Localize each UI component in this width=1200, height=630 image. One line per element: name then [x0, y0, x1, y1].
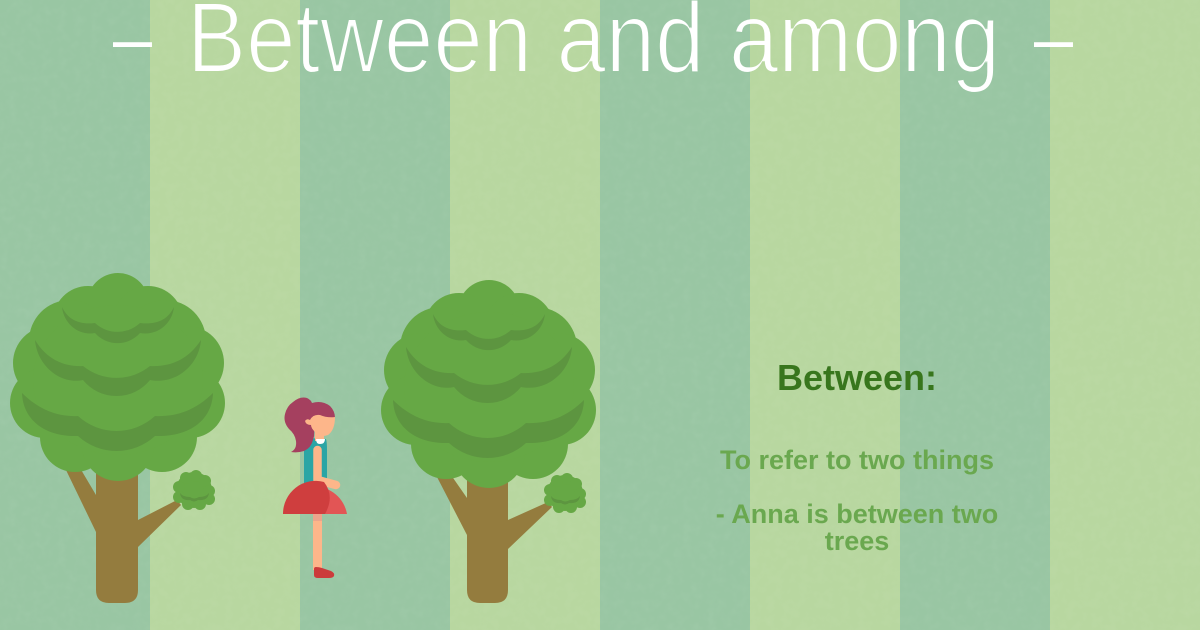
tree: left — [10, 273, 225, 603]
tree trunk and branches — [66, 468, 181, 603]
explanation text: - Anna is between two — [716, 499, 998, 529]
arm — [318, 450, 336, 485]
face — [305, 415, 335, 436]
skirt — [283, 487, 347, 514]
collar — [316, 439, 325, 444]
small bush on branch — [544, 473, 586, 513]
neck — [315, 430, 324, 441]
torso — [304, 438, 327, 484]
heading: Between: Between: — [777, 357, 937, 398]
leg — [313, 510, 322, 570]
explanation text — [716, 445, 998, 556]
explanation text: trees — [825, 526, 889, 556]
girl: Anna — [283, 398, 347, 578]
tree crown — [10, 273, 225, 481]
small bush on branch — [173, 470, 215, 510]
explanation text: To refer to two things — [720, 445, 994, 475]
tree trunk and branches — [437, 470, 552, 603]
tree crown — [381, 280, 596, 488]
tree: right — [381, 280, 596, 603]
hair — [284, 398, 335, 452]
shoe — [314, 567, 334, 578]
